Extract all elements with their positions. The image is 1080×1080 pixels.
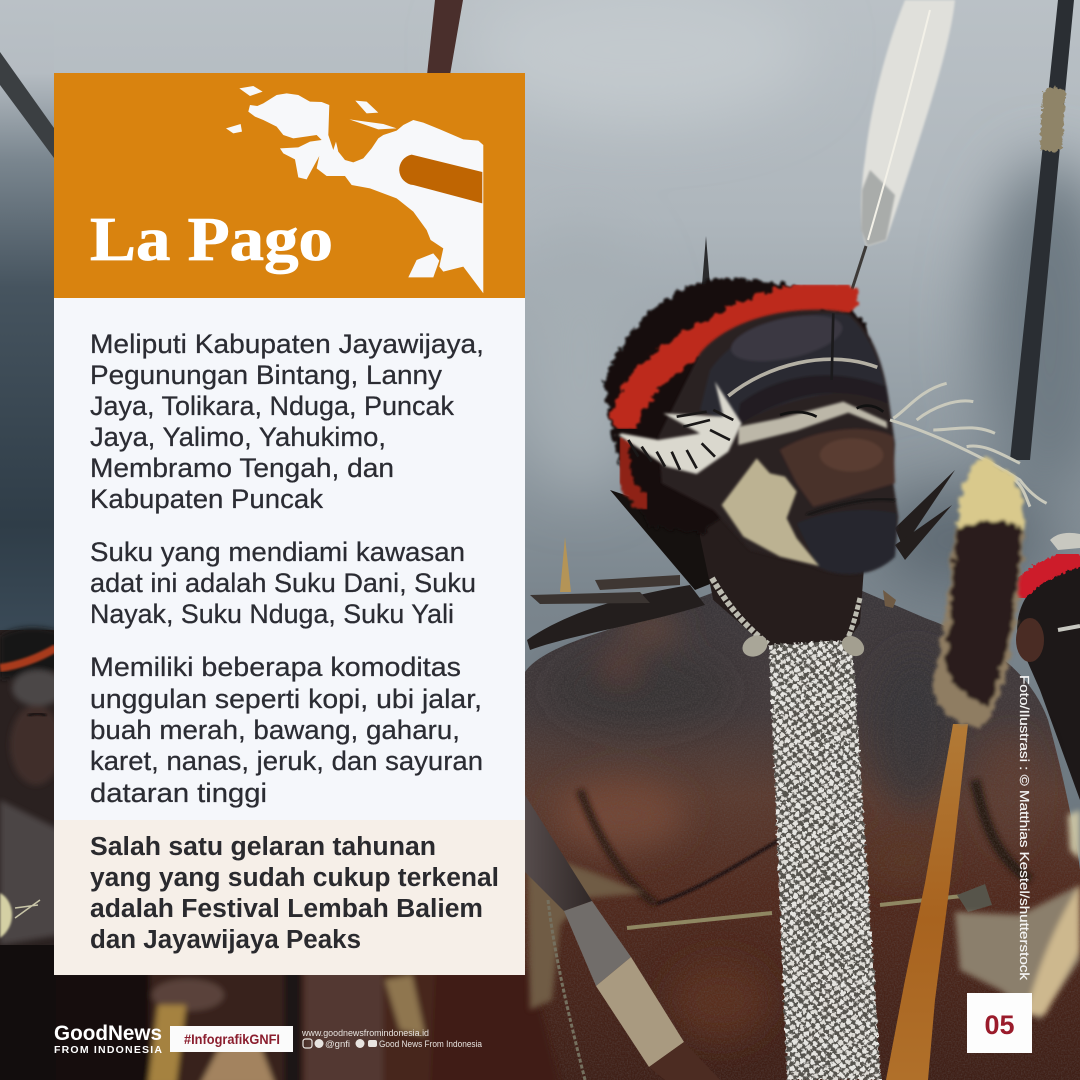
chin xyxy=(797,510,897,574)
left man cropped by the panel xyxy=(0,628,64,1080)
paragraph: districts covered: Jaya, Yalimo, Yahukimo, xyxy=(90,422,386,452)
map of Papua xyxy=(226,86,483,293)
red headband xyxy=(626,297,843,417)
title: La Pago xyxy=(90,206,333,274)
panel body xyxy=(54,298,525,820)
social media contacts: www.goodnewsfromindonesia.id xyxy=(301,1028,429,1038)
paragraph: commodities xyxy=(90,652,483,808)
logo: GoodNews from Indonesia xyxy=(54,1022,162,1056)
head with red headdress and face paint xyxy=(605,278,1047,647)
left storm sky strip xyxy=(0,0,54,640)
highlighted La Pago region xyxy=(399,155,482,203)
nose and cheek xyxy=(780,429,895,507)
bead band on forehead xyxy=(728,359,877,396)
paragraph: tribes: Nayak, Suku Nduga, Suku Yali xyxy=(90,599,454,629)
highlight callout: annual festival: Salah satu gelaran tahunan xyxy=(90,833,436,861)
social media contacts: @gnfi xyxy=(325,1039,350,1049)
white eye stripe xyxy=(738,402,887,445)
logo: GoodNews from Indonesia: GoodNews xyxy=(54,1022,162,1045)
neck xyxy=(697,457,867,647)
highlight callout: annual festival xyxy=(54,820,525,975)
dark feathers behind the neck xyxy=(527,470,955,650)
spears behind the panel xyxy=(0,0,1074,460)
paragraph: commodities: unggulan seperti kopi, ubi jalar, xyxy=(90,684,482,714)
paragraph: tribes xyxy=(90,537,476,629)
hashtag badge xyxy=(170,1026,293,1052)
paragraph: districts covered xyxy=(90,329,484,514)
second man at far right xyxy=(1016,533,1080,800)
white striped feather band xyxy=(618,382,742,474)
paragraph: commodities: dataran tinggi xyxy=(90,778,267,808)
paragraph: districts covered: Pegunungan Bintang, Lanny xyxy=(90,360,443,390)
paragraph: commodities: Memiliki beberapa komoditas xyxy=(90,652,461,682)
wooden club and fur stick xyxy=(886,460,1024,1080)
black hair xyxy=(605,278,873,533)
white head feather xyxy=(702,0,955,311)
social media contacts xyxy=(301,1028,482,1049)
diagonal bow shaft in the foreground xyxy=(525,795,720,1080)
logo: GoodNews from Indonesia: FROM INDONESIA xyxy=(54,1044,162,1056)
waist cord xyxy=(627,884,992,928)
body: torso and shoulders xyxy=(525,591,1080,1080)
social media contacts: Good News From Indonesia xyxy=(379,1039,482,1049)
page number: 05 xyxy=(984,1010,1015,1040)
paragraph: districts covered: Jaya, Tolikara, Nduga, Puncak xyxy=(90,391,455,421)
panel: La Pago region description xyxy=(54,73,525,975)
feather sprig in front of face xyxy=(890,383,1047,507)
cream cheek paint xyxy=(722,458,819,566)
skin grain xyxy=(525,590,1080,1080)
highlight callout: annual festival: adalah Festival Lembah Baliem xyxy=(90,895,483,923)
panel header: orange with map xyxy=(54,73,525,298)
page number xyxy=(967,993,1032,1053)
face xyxy=(658,307,898,574)
paragraph: tribes: adat ini adalah Suku Dani, Suku xyxy=(90,568,476,598)
paragraph: tribes: Suku yang mendiami kawasan xyxy=(90,537,465,567)
highlight callout: annual festival: dan Jayawijaya Peaks xyxy=(90,926,361,954)
paragraph: commodities: buah merah, bawang, gaharu, xyxy=(90,715,460,745)
paragraph: districts covered: Kabupaten Puncak xyxy=(90,484,324,514)
feather skirt at lower right xyxy=(955,810,1080,1020)
lower-left crowd below the panel xyxy=(0,970,560,1080)
necklace of cowrie shells xyxy=(712,578,881,1080)
forehead xyxy=(700,314,887,427)
paragraph: commodities: karet, nanas, jeruk, dan sayuran xyxy=(90,746,483,776)
hashtag badge: #InfografikGNFI xyxy=(184,1031,280,1047)
lower red band xyxy=(622,443,645,503)
photo credit: Foto/Ilustrasi : © Matthias Kestel/shutterstock xyxy=(1017,675,1032,981)
paragraph: districts covered: Membramo Tengah, dan xyxy=(90,453,394,483)
paragraph: districts covered: Meliputi Kabupaten Jayawijaya, xyxy=(90,329,484,359)
highlight callout: annual festival: yang yang sudah cukup terkenal xyxy=(90,864,499,892)
